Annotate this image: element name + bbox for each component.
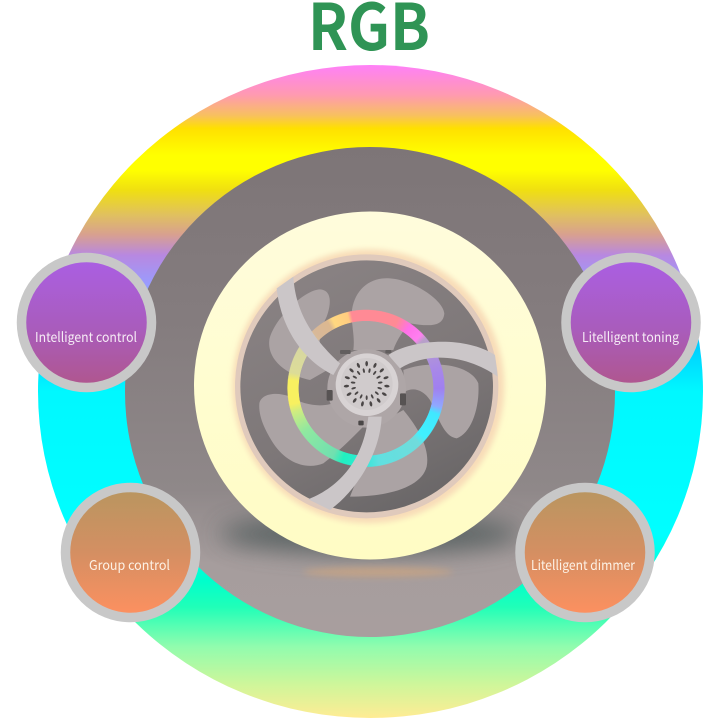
dark fan cavity xyxy=(240,260,493,512)
motor housing xyxy=(327,349,406,428)
rainbow LED ring xyxy=(287,309,445,467)
glowing light ring xyxy=(194,212,546,560)
grey wall disc with floor shadow xyxy=(124,147,616,637)
badge: Litelligent dimmer xyxy=(520,488,650,618)
support arms xyxy=(277,277,498,510)
badge: Litelligent toning xyxy=(566,258,696,388)
centre hub with speaker holes xyxy=(336,353,398,416)
fan blades xyxy=(259,278,479,497)
badge: Litelligent dimmer: Litelligent dimmer xyxy=(531,554,636,574)
badge: Intelligent control: Intelligent control xyxy=(35,326,137,346)
ceiling fan light xyxy=(194,212,546,560)
badge: Intelligent control xyxy=(22,258,152,388)
badge: Group control xyxy=(66,488,196,618)
badge: Group control: Group control xyxy=(89,554,170,574)
badge: Litelligent toning: Litelligent toning xyxy=(582,326,679,346)
peach inner rim xyxy=(232,249,504,523)
